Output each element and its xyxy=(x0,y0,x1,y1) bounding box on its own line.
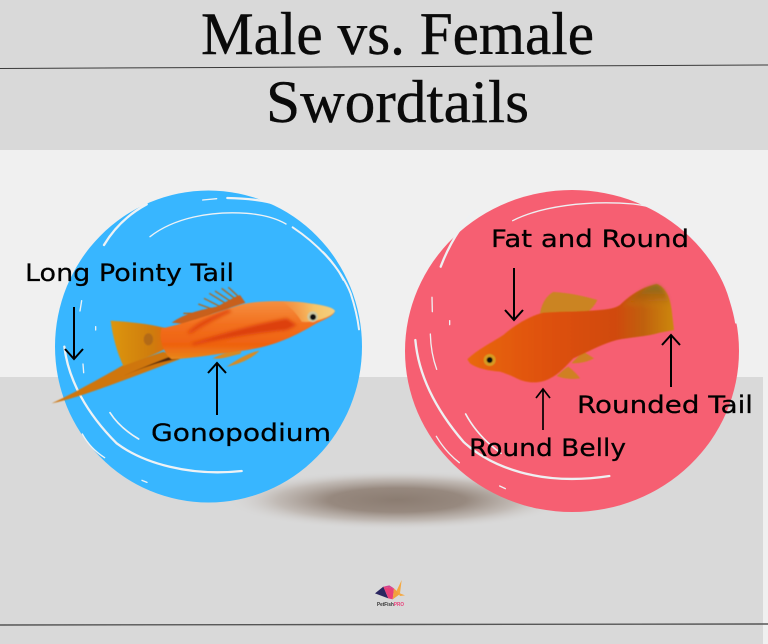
white brush strokes xyxy=(64,198,359,482)
arrow: gonopodium xyxy=(208,363,226,415)
logo fish mark xyxy=(375,580,405,599)
pink brush circle xyxy=(405,190,739,512)
upper red stripe xyxy=(187,309,232,333)
floor shadow xyxy=(225,470,569,530)
body and tail xyxy=(467,284,674,382)
white brush strokes xyxy=(415,203,736,489)
sword dark edge xyxy=(120,357,180,377)
background: top band xyxy=(0,0,768,150)
lower fins xyxy=(557,353,594,379)
label: fat and round: Fat and Round xyxy=(491,225,689,253)
tail dark shading xyxy=(623,285,671,310)
arrow: fat and round xyxy=(505,268,523,320)
label: round belly: Round Belly xyxy=(469,434,626,462)
fish: female swordtail xyxy=(467,284,674,382)
panel: female swordtail xyxy=(405,190,753,512)
panel: male swordtail xyxy=(25,190,362,502)
title xyxy=(201,1,594,135)
eye xyxy=(307,311,318,322)
tail base dark spot xyxy=(144,333,153,345)
lateral stripe xyxy=(192,318,297,345)
arrow: rounded tail xyxy=(662,335,680,387)
arrow: long pointy tail xyxy=(65,307,83,359)
dorsal fin rays xyxy=(183,287,241,313)
label: long pointy tail: Long Pointy Tail xyxy=(25,259,234,287)
label: gonopodium: Gonopodium xyxy=(151,419,331,447)
tail fin xyxy=(111,321,175,366)
dorsal fin xyxy=(540,292,597,313)
arrow: round belly xyxy=(536,389,550,430)
background: light middle panel xyxy=(0,150,768,644)
background: floor panel xyxy=(0,377,763,644)
head highlight xyxy=(282,301,335,322)
gonopodium and fins xyxy=(213,351,259,367)
logo wordmark: PetFishPRO xyxy=(377,602,404,608)
blue brush circle xyxy=(55,190,362,502)
sword tail xyxy=(52,352,180,403)
dorsal fin xyxy=(172,295,245,324)
label: rounded tail: Rounded Tail xyxy=(577,391,753,419)
eye xyxy=(484,354,496,366)
fish: male swordtail xyxy=(52,287,335,403)
logo: PetFishPRO xyxy=(375,580,405,608)
title line 2: Swordtails xyxy=(266,69,529,135)
body xyxy=(161,301,335,359)
title line 1: Male vs. Female xyxy=(201,1,594,67)
